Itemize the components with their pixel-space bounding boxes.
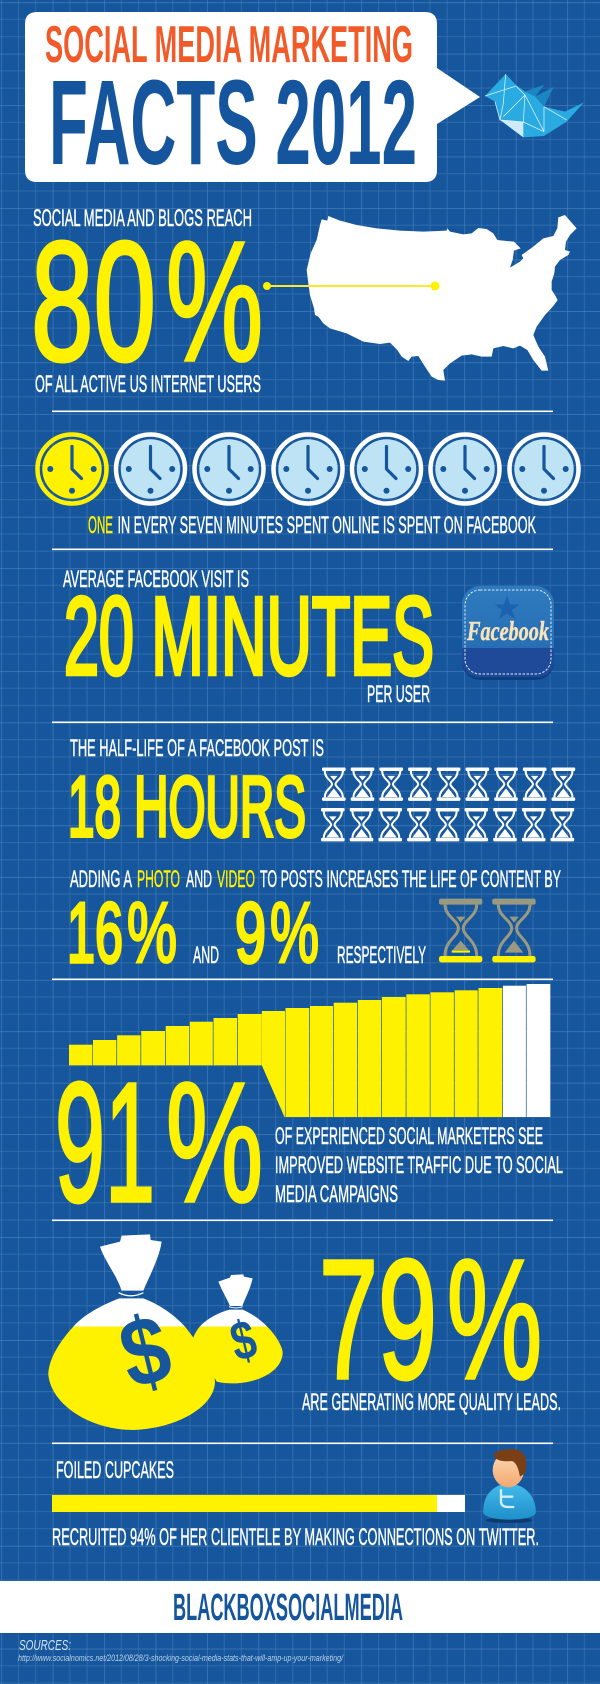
text: adding a photo and video: AND — [186, 866, 212, 893]
stat: 91%: % — [166, 1048, 263, 1238]
stat: 18 hours: 18 HOURS — [68, 760, 306, 855]
stat: 9%: 9 — [235, 886, 266, 981]
title banner — [25, 12, 480, 190]
infographic canvas: RESPECTIVELY — [337, 942, 426, 969]
icon: tan hourglass video — [492, 899, 536, 962]
text: foiled cupcakes: FOILED CUPCAKES — [56, 1457, 174, 1484]
text: adding a photo and video: VIDEO — [217, 866, 255, 893]
icon: tan hourglass photo — [439, 899, 482, 962]
icon: origami bird — [485, 74, 584, 137]
icon: blue clock 3 — [274, 434, 342, 504]
text: and: AND — [193, 942, 219, 969]
stat: 91%: 91 — [55, 1048, 155, 1238]
text: of all active us internet users: OF ALL ACTIVE US INTERNET USERS — [35, 371, 261, 398]
map: united states — [307, 215, 577, 381]
icon: blue clock 4 — [352, 434, 421, 504]
icon: money bags — [48, 1234, 283, 1430]
stat: 16%: 16 — [67, 886, 123, 981]
stat: 9%: % — [270, 886, 319, 981]
small money bag: $ — [224, 1307, 262, 1373]
big money bag: $ — [110, 1295, 181, 1410]
icon: blue clock 2 — [194, 434, 264, 504]
text: experienced social marketers: MEDIA CAMPAIGNS — [275, 1181, 398, 1208]
icon: facebook denim badge — [462, 586, 554, 680]
text: adding a photo and video: ADDING A — [70, 866, 132, 893]
text: average facebook visit is: AVERAGE FACEBOOK VISIT IS — [63, 566, 249, 593]
icon: facebook denim badge: Facebook — [466, 616, 549, 646]
icon: blue clock 1 — [116, 434, 185, 504]
sources heading: SOURCES: — [19, 1637, 71, 1654]
stat: 80%: % — [166, 207, 263, 397]
small money bag — [193, 1274, 283, 1383]
text: per user: PER USER — [367, 681, 430, 708]
text: adding a photo and video: PHOTO — [137, 866, 180, 893]
bar chart: 91 percent stepped bars — [69, 984, 550, 1117]
stat: 80%: 80 — [31, 207, 156, 397]
big money bag — [48, 1234, 215, 1430]
text: adding a photo and video — [70, 866, 561, 893]
icon group: hourglasses — [321, 768, 575, 841]
text: experienced social marketers — [275, 1123, 563, 1208]
sources link: http://www.socialnomics.net/2012/08/28/3-shocking-social-media-stats-that-will-amp-up-your-marketing/ — [18, 1653, 344, 1663]
stat: 79%: % — [447, 1225, 542, 1415]
stat: 79%: 79 — [319, 1225, 437, 1415]
icon: blue clock 5 — [430, 434, 500, 504]
text: the half-life of a facebook post is: THE HALF-LIFE OF A FACEBOOK POST IS — [70, 735, 324, 762]
connector line from 80% to map — [263, 282, 440, 290]
text: one in every seven minutes: ONE — [88, 512, 113, 539]
footer band — [0, 1581, 600, 1633]
progress bar: 94 percent — [52, 1495, 465, 1512]
stat: 9% — [235, 886, 319, 981]
icon: yellow clock — [38, 434, 106, 504]
text: social media and blogs reach: SOCIAL MEDIA AND BLOGS REACH — [33, 205, 252, 232]
clocks row — [38, 434, 578, 504]
stat: 16%: % — [127, 886, 177, 981]
icon: twitter user — [483, 1449, 536, 1523]
icon: blue clock 6 — [510, 434, 578, 504]
